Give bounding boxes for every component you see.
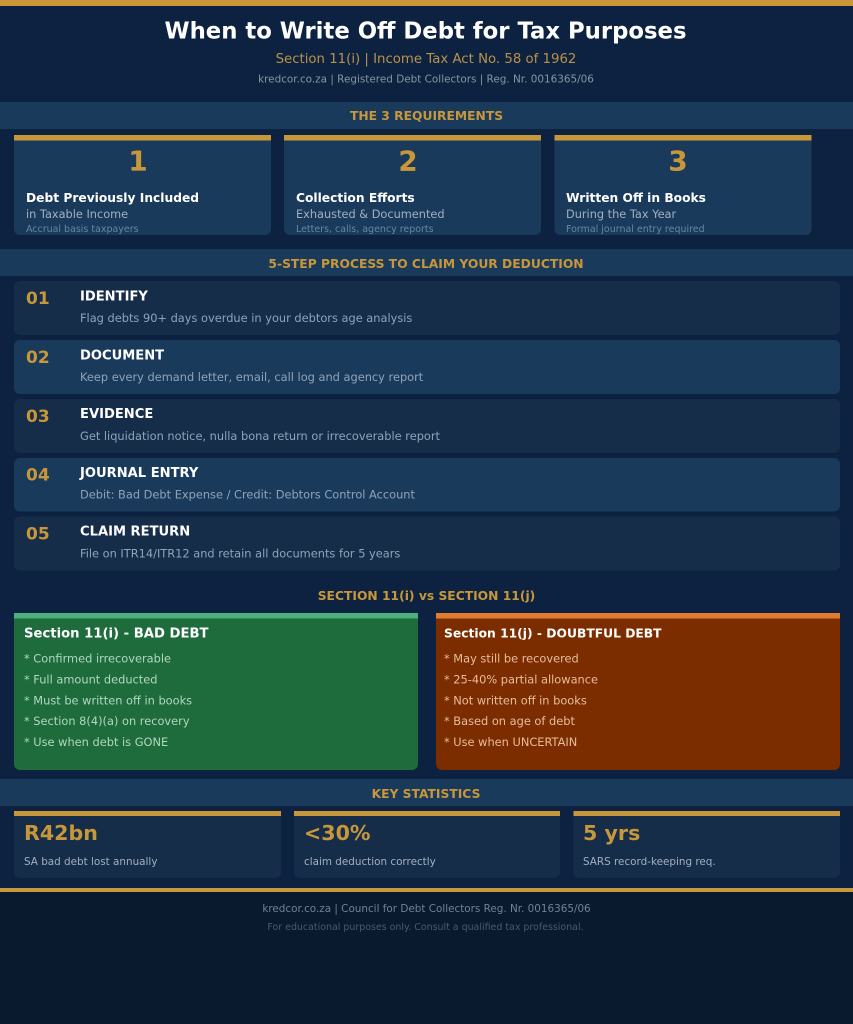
stat: R42bn: R42bn bbox=[24, 821, 98, 845]
panel: section 11(i) bad debt bbox=[14, 613, 418, 770]
stat: R42bn: SA bad debt lost annually bbox=[24, 856, 157, 868]
panel: requirement 1 bbox=[14, 135, 271, 235]
panel: requirement 1: Debt Previously Included bbox=[26, 191, 199, 205]
step 02: Keep every demand letter, email, call log and agency report bbox=[80, 370, 424, 384]
step 01 bbox=[14, 281, 840, 335]
section heading: 5-step process: 5-STEP PROCESS TO CLAIM YOUR DEDUCTION bbox=[268, 257, 584, 271]
heading: section 11(i) vs section 11(j): SECTION 11(i) vs SECTION 11(j) bbox=[318, 589, 535, 603]
header bbox=[0, 0, 853, 86]
section heading: key statistics: KEY STATISTICS bbox=[372, 787, 480, 801]
panel: requirement 3: Formal journal entry required bbox=[566, 224, 705, 235]
panel: section 11(j) doubtful debt: * May still be recovered bbox=[444, 652, 579, 666]
panel: section 11(i) bad debt: * Use when debt is GONE bbox=[24, 735, 168, 749]
step 04 bbox=[14, 458, 840, 512]
panel: requirement 2: 2 bbox=[398, 144, 418, 178]
panel: section 11(j) doubtful debt: * Not written off in books bbox=[444, 694, 587, 708]
registration line: kredcor.co.za | Registered Debt Collectors | Reg. Nr. 0016365/06 bbox=[258, 74, 594, 86]
panel: requirement 2 bbox=[284, 135, 541, 235]
step 03: EVIDENCE bbox=[80, 407, 153, 422]
step 03: Get liquidation notice, nulla bona return or irrecoverable report bbox=[80, 429, 441, 443]
step 03 bbox=[14, 399, 840, 453]
panel: requirement 2: Letters, calls, agency reports bbox=[296, 224, 434, 235]
panel: section 11(j) doubtful debt: Section 11(j) - DOUBTFUL DEBT bbox=[444, 626, 662, 640]
title: When to Write Off Debt for Tax Purposes bbox=[164, 18, 686, 44]
stat: under 30%: <30% bbox=[304, 821, 371, 845]
disclaimer: For educational purposes only. Consult a qualified tax professional. bbox=[267, 922, 584, 933]
section heading: 5-step process bbox=[0, 249, 853, 276]
panel: section 11(i) bad debt: * Section 8(4)(a) on recovery bbox=[24, 714, 190, 728]
section heading: the 3 requirements bbox=[0, 102, 853, 129]
step 01: IDENTIFY bbox=[80, 290, 148, 304]
step 05: 05 bbox=[26, 524, 50, 544]
panel: section 11(i) bad debt: * Confirmed irrecoverable bbox=[24, 652, 171, 666]
stat: 5 yrs: 5 yrs bbox=[583, 821, 640, 845]
panel: section 11(i) bad debt: * Full amount deducted bbox=[24, 672, 157, 686]
panel: section 11(j) doubtful debt bbox=[436, 613, 840, 770]
section heading: key statistics bbox=[0, 779, 853, 806]
step 05: File on ITR14/ITR12 and retain all documents for 5 years bbox=[80, 546, 400, 560]
section heading: the 3 requirements: THE 3 REQUIREMENTS bbox=[350, 109, 503, 123]
panel: section 11(i) bad debt: * Must be written off in books bbox=[24, 694, 192, 708]
footer registration line: kredcor.co.za | Council for Debt Collectors Reg. Nr. 0016365/06 bbox=[262, 903, 591, 915]
panel: requirement 3 bbox=[554, 135, 812, 235]
panel: section 11(j) doubtful debt: * 25-40% partial allowance bbox=[444, 672, 598, 686]
panel: requirement 2: Exhausted & Documented bbox=[296, 207, 445, 221]
step 02: 02 bbox=[26, 348, 50, 368]
step 02 bbox=[14, 340, 840, 394]
stat: 5 yrs bbox=[574, 811, 840, 878]
stat: under 30%: claim deduction correctly bbox=[304, 856, 436, 868]
panel: requirement 1: in Taxable Income bbox=[26, 207, 128, 221]
step 03: 03 bbox=[26, 407, 50, 427]
footer bbox=[0, 888, 853, 1024]
panel: requirement 1: 1 bbox=[128, 144, 148, 178]
panel: section 11(j) doubtful debt: * Use when UNCERTAIN bbox=[444, 735, 577, 749]
panel: requirement 3: During the Tax Year bbox=[566, 207, 676, 221]
panel: requirement 1: Accrual basis taxpayers bbox=[26, 224, 139, 235]
step 02: DOCUMENT bbox=[80, 348, 164, 364]
stat: R42bn bbox=[14, 811, 281, 878]
step 04: JOURNAL ENTRY bbox=[79, 466, 199, 481]
step 04: Debit: Bad Debt Expense / Credit: Debtors Control Account bbox=[80, 488, 416, 502]
step 05: CLAIM RETURN bbox=[80, 524, 190, 540]
step 01: 01 bbox=[26, 289, 50, 309]
subtitle: Section 11(i) | Income Tax Act No. 58 of 1962 bbox=[276, 52, 576, 67]
panel: requirement 3: Written Off in Books bbox=[566, 191, 706, 205]
stat: 5 yrs: SARS record-keeping req. bbox=[583, 856, 716, 868]
panel: requirement 2: Collection Efforts bbox=[296, 191, 415, 205]
panel: requirement 3: 3 bbox=[668, 144, 688, 178]
stat: under 30% bbox=[294, 811, 560, 878]
step 05 bbox=[14, 516, 840, 570]
panel: section 11(i) bad debt: Section 11(i) - BAD DEBT bbox=[24, 626, 209, 642]
step 04: 04 bbox=[26, 466, 50, 486]
step 01: Flag debts 90+ days overdue in your debtors age analysis bbox=[80, 311, 412, 325]
panel: section 11(j) doubtful debt: * Based on age of debt bbox=[444, 714, 575, 728]
